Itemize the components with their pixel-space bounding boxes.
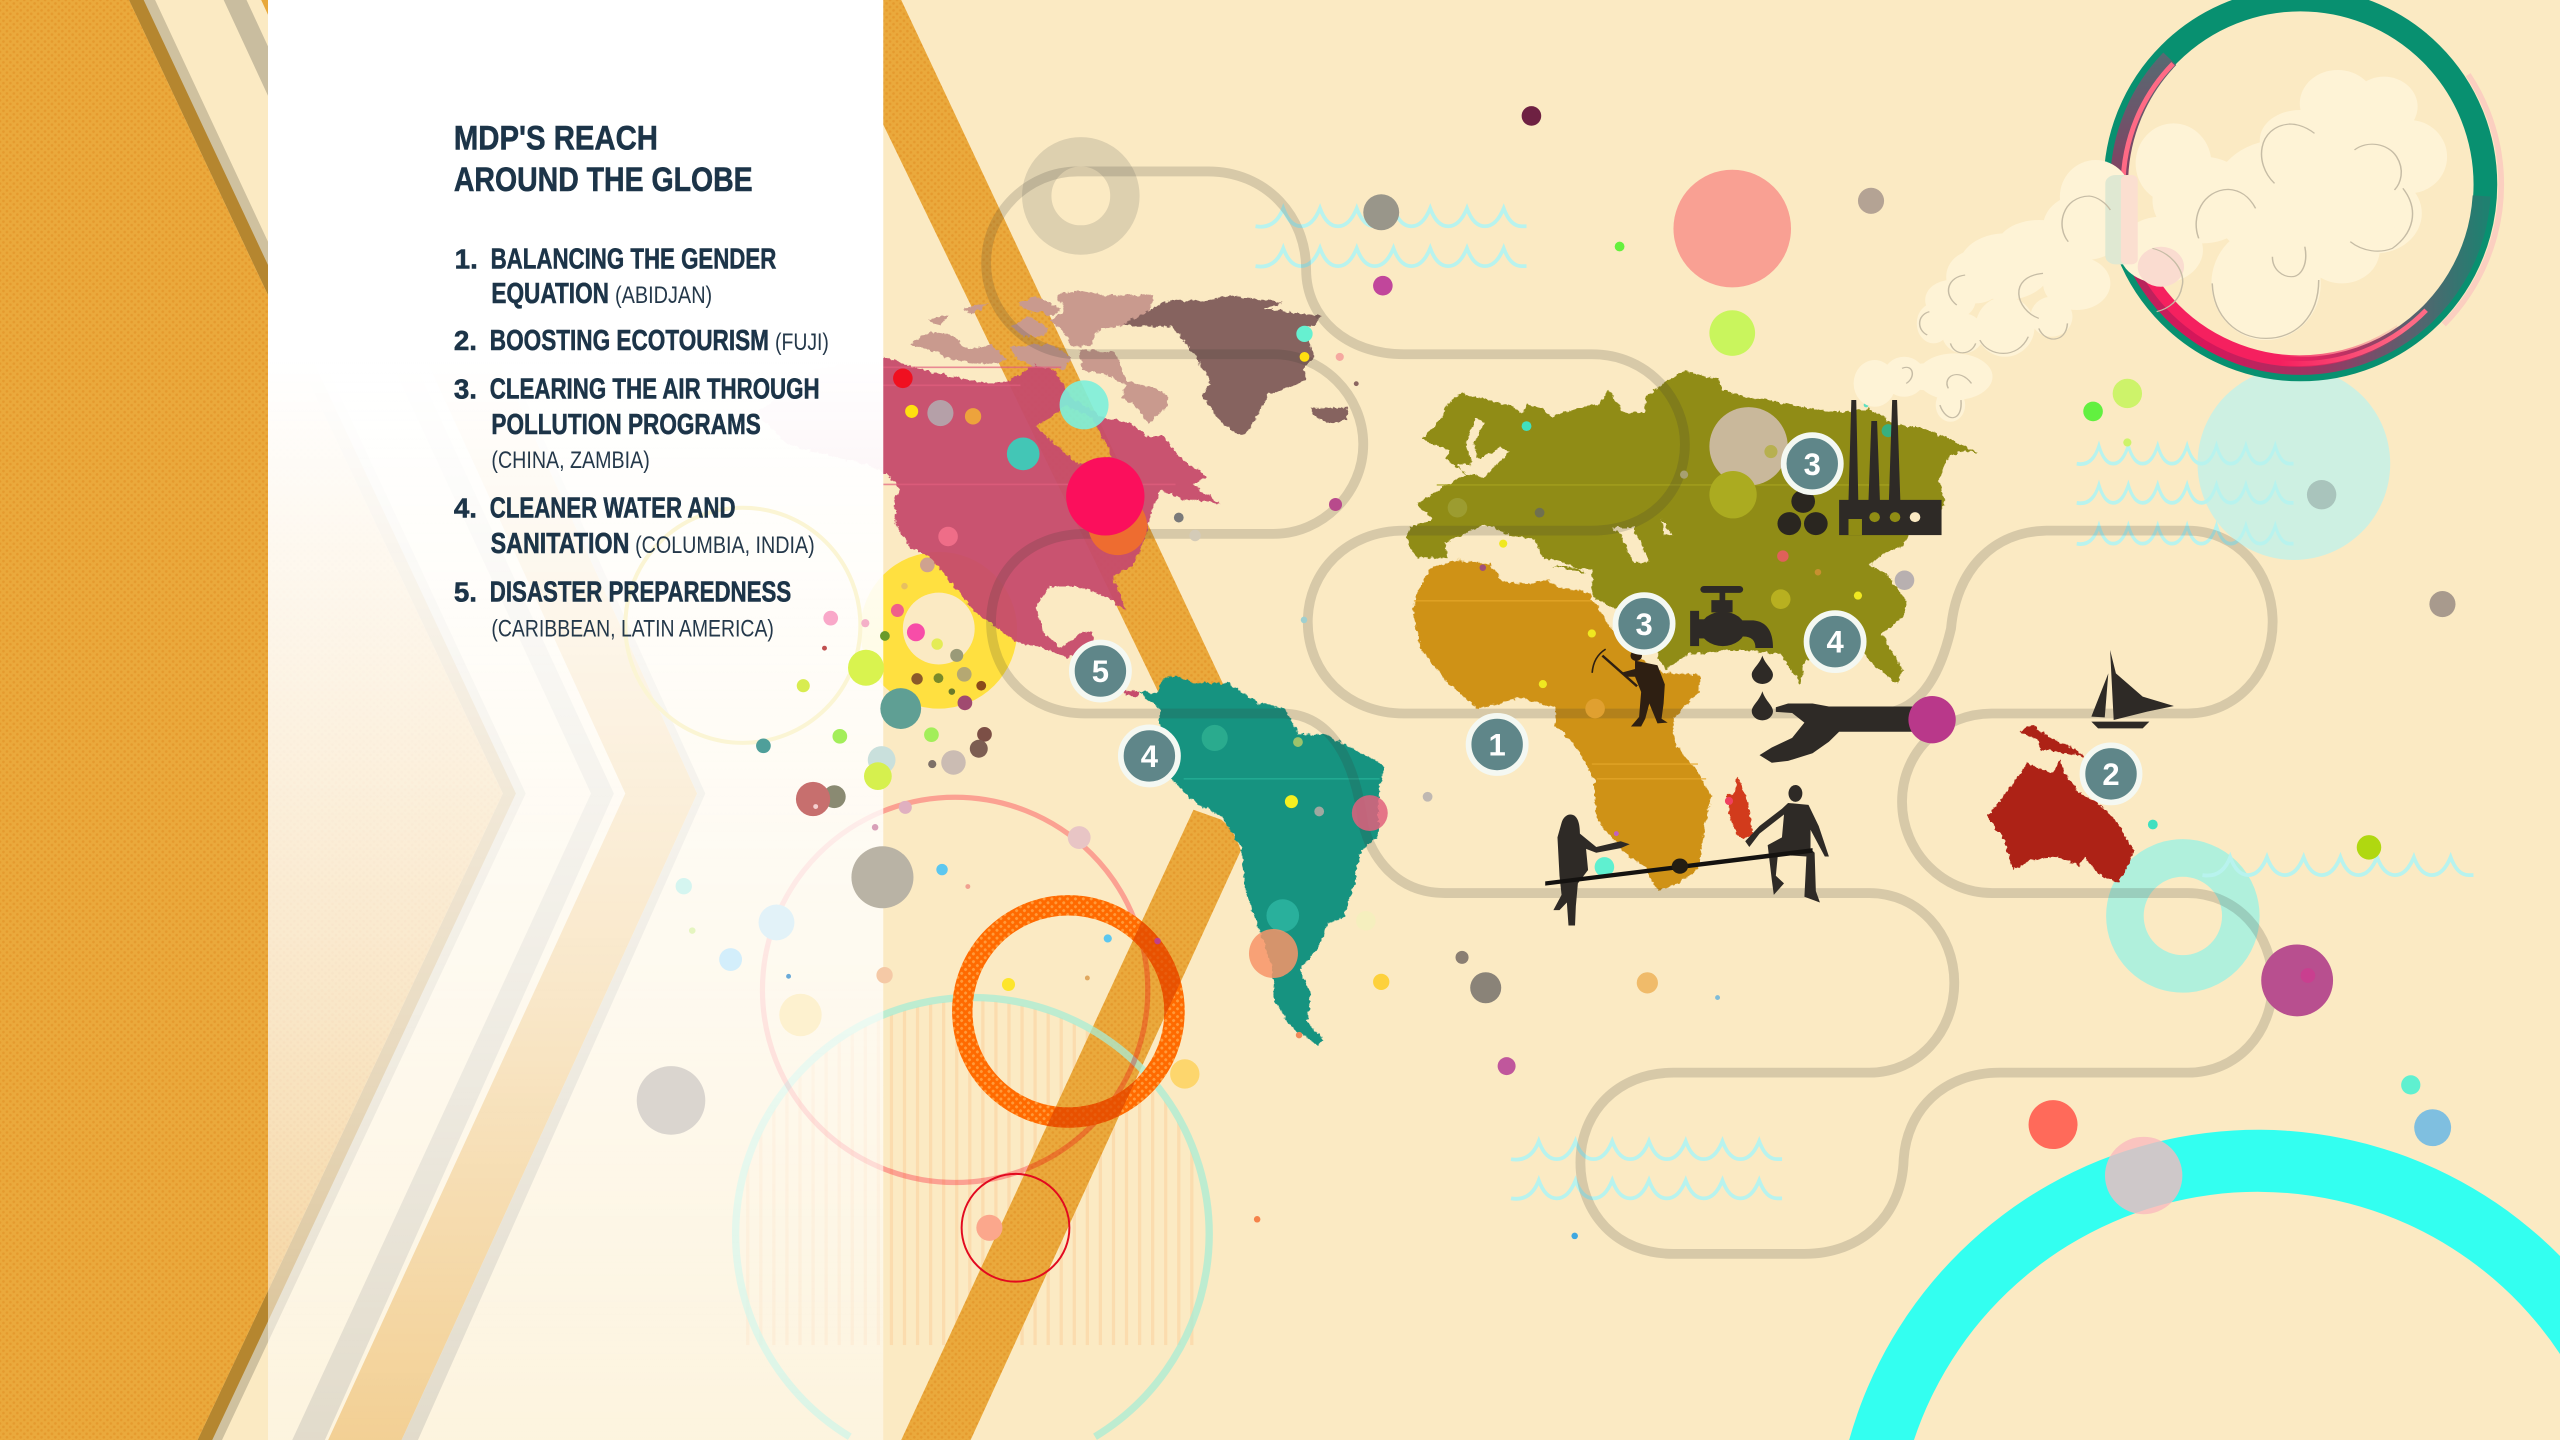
map: north america — [757, 357, 1221, 697]
route road — [986, 171, 2273, 1254]
item 4: CLEANER WATER AND — [490, 492, 736, 524]
faint scan lines on continents — [883, 367, 1894, 779]
ring: tan donut — [1037, 152, 1125, 240]
title: AROUND THE GLOBE — [454, 161, 753, 199]
ring: orange halftone — [962, 905, 1175, 1118]
map: south america — [1139, 676, 1384, 1046]
map: australia and new guinea — [1986, 725, 2134, 883]
white side panel — [268, 0, 883, 1440]
marker 4 india — [1807, 613, 1864, 670]
marker 4 colombia — [1121, 727, 1178, 784]
world map continents — [757, 291, 2134, 1046]
item 4: 4. — [454, 493, 477, 524]
marker 3 africa: 3 — [1635, 607, 1653, 642]
item 3: (CHINA, ZAMBIA) — [491, 447, 650, 474]
title — [454, 119, 753, 199]
item 5: DISASTER PREPAREDNESS — [490, 575, 791, 607]
item 1: BALANCING THE GENDER — [491, 243, 776, 275]
icon: reaching hand — [1760, 703, 1915, 763]
stripes inside green ring — [748, 980, 1192, 1345]
marker 3 africa — [1616, 595, 1673, 652]
disc: pale teal — [2198, 367, 2390, 560]
item 3: CLEARING THE AIR THROUGH — [490, 372, 820, 404]
ring: pink — [762, 797, 1148, 1183]
icon: seesaw with woman and man — [1545, 785, 1829, 925]
dot: magenta wrist — [1908, 696, 1956, 743]
marker 4 colombia: 4 — [1141, 739, 1159, 774]
title: MDP'S REACH — [454, 119, 658, 157]
diagonal orange band — [823, 0, 1241, 1440]
left chevron bands — [0, 0, 705, 1440]
item 4 — [454, 492, 815, 559]
dots above panel — [625, 508, 921, 1135]
item 2: 2. — [454, 325, 477, 356]
marker 5: 5 — [1092, 654, 1109, 689]
item 1 — [455, 243, 776, 309]
ring: thin red — [962, 1174, 1069, 1282]
ring: pale green — [736, 997, 1209, 1437]
marker 2 — [2082, 745, 2140, 802]
icon: miner — [1592, 649, 1668, 726]
icon: coal circles — [1777, 490, 1828, 535]
top right ring — [2103, 0, 2501, 384]
item 5: 5. — [454, 576, 477, 607]
scattered dots on map — [891, 106, 2456, 1241]
ring: cyan arc — [1849, 1130, 2560, 1440]
ring: orange over band — [1047, 921, 1181, 1128]
marker 2: 2 — [2102, 757, 2120, 792]
icon: sailboat — [2091, 650, 2174, 728]
item 3: POLLUTION PROGRAMS — [491, 408, 761, 440]
item 1: 1. — [455, 244, 478, 275]
item 3 — [454, 372, 820, 474]
marker 1 — [1469, 716, 1526, 773]
marker 3 north asia — [1784, 435, 1841, 492]
marker 1: 1 — [1489, 728, 1506, 763]
item 1: (ABIDJAN) — [615, 282, 712, 309]
item 5 — [454, 575, 791, 643]
map: madagascar — [1727, 776, 1753, 837]
item 5: (CARIBBEAN, LATIN AMERICA) — [491, 616, 774, 643]
icon: factory — [1839, 400, 1942, 535]
marker 3 north asia: 3 — [1804, 447, 1821, 482]
ring: aqua donut — [2125, 858, 2241, 974]
map: greenland — [1123, 296, 1348, 436]
map: africa — [1413, 560, 1711, 891]
item 2: BOOSTING ECOTOURISM — [490, 324, 769, 356]
marker 4 india: 4 — [1826, 625, 1844, 660]
yellow disc with dots — [860, 552, 1017, 709]
item 2: (FUJI) — [775, 329, 829, 356]
waves — [1256, 208, 2473, 1199]
map: eurasia — [1406, 371, 1978, 684]
item 4: SANITATION — [491, 527, 629, 559]
smoke clouds — [1854, 70, 2447, 422]
item 3: 3. — [454, 373, 477, 404]
item 1: EQUATION — [491, 277, 609, 309]
map: arctic islands — [909, 291, 1168, 423]
icon: faucet — [1690, 586, 1773, 720]
marker 5 — [1072, 642, 1129, 700]
item 4: (COLUMBIA, INDIA) — [635, 532, 815, 559]
list: programs — [454, 243, 829, 643]
